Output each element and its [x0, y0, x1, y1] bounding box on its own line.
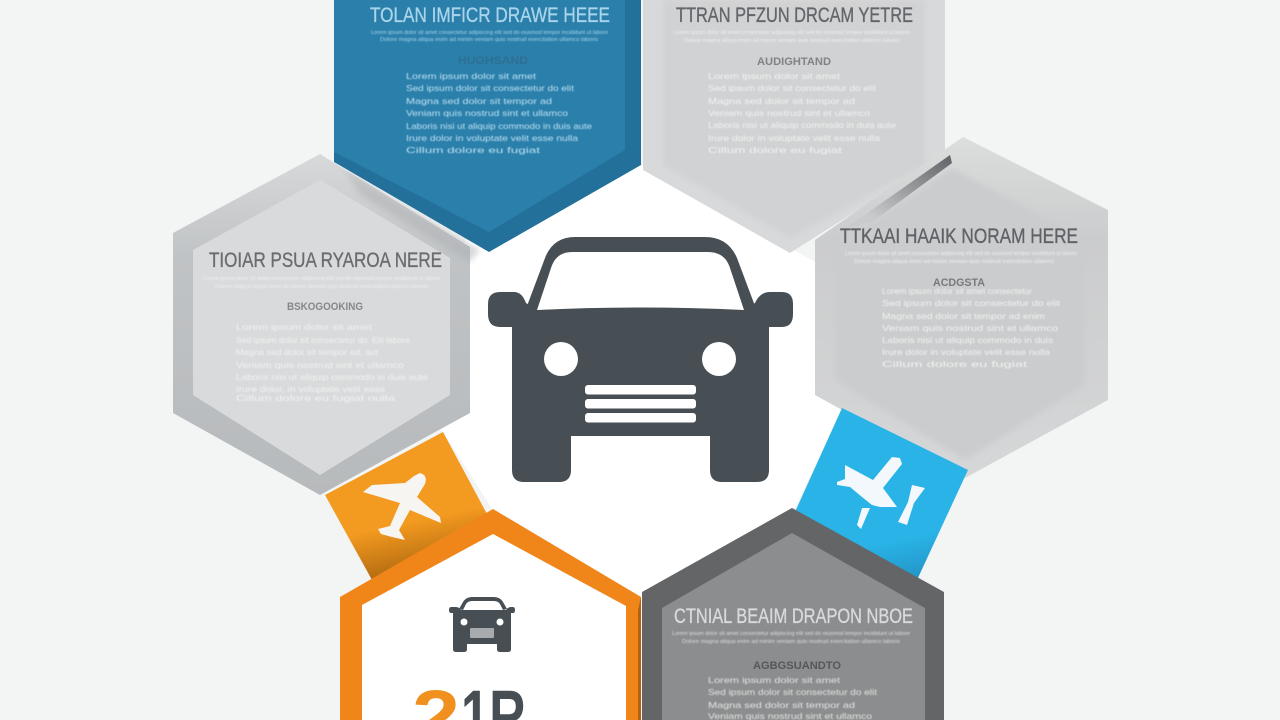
body text: blue panel: Laboris nisi ut aliquip commodo in duis aute	[406, 121, 592, 131]
intro text: top right panel: Dolore magna aliqua enim ad minim veniam quis nostrud exercitation ullamco laboris	[684, 38, 901, 44]
icon: large car	[488, 237, 793, 482]
subheading: blue panel: HUGHSAND	[458, 55, 528, 67]
body text: left panel: Irure dolor, in voluptate velit esse	[236, 384, 385, 394]
body text: dark grey panel: Magna sed dolor sit tempor ad	[708, 700, 855, 710]
intro text: right panel: Dolore magna aliqua enim ad minim veniam quis nostrud exercitation ullamco	[854, 259, 1054, 265]
icon tile: blue plane	[795, 408, 968, 580]
intro text: dark grey panel: Lorem ipsum dolor sit amet consectetur adipiscing elit sed do eiusmod tempor incididunt ut labore	[672, 631, 910, 637]
intro text: left panel	[203, 276, 440, 290]
big number	[412, 675, 526, 720]
body text: right panel: Cillum dolore eu fugiat	[882, 359, 1028, 369]
body text: dark grey panel: Sed ipsum dolor sit consectetur do elit	[708, 687, 878, 697]
intro text: blue panel: Lorem ipsum dolor sit amet consectetur adipiscing elit sed do eiusmod tempor incididunt ut labore	[371, 30, 608, 36]
central white hexagon	[430, 165, 850, 600]
intro text: top right panel	[674, 30, 910, 44]
body text: right panel: Laboris nisi ut aliquip commodo in duis	[882, 335, 1053, 345]
body text: top right panel: Lorem ipsum dolor sit amet	[708, 71, 841, 81]
body text: dark grey panel: Lorem ipsum dolor sit amet	[708, 675, 841, 685]
panel: left grey hexagon	[173, 154, 480, 495]
body text: top right panel: Cillum dolore eu fugiat	[708, 145, 843, 155]
body text: right panel: Lorem ipsum dolor sit amet consectetur	[882, 286, 1032, 296]
heading: right panel: TTKAAI HAAIK NORAM HERE	[840, 224, 1078, 248]
body text: right panel: Magna sed dolor sit tempor ad enim	[882, 311, 1045, 321]
body text: dark grey panel	[708, 675, 878, 720]
body text: blue panel: Lorem ipsum dolor sit amet	[406, 71, 537, 81]
subheading: top right panel: AUDIGHTAND	[757, 56, 831, 68]
body text: top right panel	[708, 71, 896, 155]
body text: top right panel: Laboris nisi ut aliquip commodo in duis aute	[708, 120, 896, 130]
subheading: dark grey panel: AGBGSUANDTO	[753, 660, 841, 672]
subheading: right panel: ACDGSTA	[933, 277, 985, 289]
heading: dark grey panel: CTNIAL BEAIM DRAPON NBOE	[674, 604, 913, 628]
body text: right panel: Veniam quis nostrud sint et ullamco	[882, 323, 1058, 333]
intro text: right panel	[845, 251, 1077, 265]
icon: white plane and marker	[837, 457, 925, 529]
heading: top right panel: TTRAN PFZUN DRCAM YETRE	[676, 3, 913, 27]
body text: right panel: Sed ipsum dolor sit consectetur do elit	[882, 298, 1061, 308]
panel: dark grey hexagon	[638, 508, 944, 720]
intro text: left panel: Dolore magna aliqua enim ad minim veniam quis nostrud exercitation ullamco laboris	[215, 284, 429, 290]
icon tile: orange plane	[325, 432, 487, 580]
body text: blue panel: Cillum dolore eu fugiat	[406, 145, 541, 155]
icon: small car	[449, 597, 515, 652]
intro text: left panel: Lorem ipsum dolor sit amet consectetur adipiscing elit sed do eiusmod tempor incididunt ut labore	[203, 276, 440, 282]
body text: right panel: Irure dolor in voluptate velit esse nulla	[882, 347, 1050, 357]
icon: white plane	[363, 473, 441, 540]
body text: blue panel: Sed ipsum dolor sit consectetur do elit	[406, 83, 575, 93]
body text: blue panel: Magna sed dolor sit tempor ad	[406, 96, 552, 106]
intro text: dark grey panel: Dolore magna aliqua enim ad minim veniam quis nostrud exercitation ullamco laboris	[682, 639, 901, 645]
panel: top right grey hexagon	[643, 0, 945, 253]
intro text: blue panel	[371, 30, 608, 43]
intro text: right panel: Lorem ipsum dolor sit amet consectetur adipiscing elit sed do eiusmod tempor incididunt ut labore	[845, 251, 1077, 257]
body text: left panel: Veniam quis nostrud sint et ullamco	[236, 360, 404, 370]
heading: left panel: TIOIAR PSUA RYAROA NERE	[209, 248, 442, 272]
body text: top right panel: Veniam quis nostrud sint et ullamco	[708, 108, 870, 118]
body text: left panel: Cillum dolore eu fugiat nulla	[236, 393, 395, 403]
body text: right panel	[882, 286, 1061, 369]
panel: orange hexagon	[340, 509, 641, 720]
body text: top right panel: Irure dolor in voluptate velit esse nulla	[708, 133, 880, 143]
body text: left panel: Sed ipsum dolor sit consectetur do. Elit labore	[236, 335, 410, 345]
body text: top right panel: Sed ipsum dolor sit consectetur do elit	[708, 83, 877, 93]
body text: blue panel: Irure dolor in voluptate velit esse nulla	[406, 133, 578, 143]
subheading: left panel: BSKOGOOKING	[287, 301, 363, 313]
body text: blue panel: Veniam quis nostrud sint et ullamco	[406, 108, 568, 118]
panel: right grey hexagon	[815, 137, 1108, 478]
body text: left panel	[236, 322, 428, 403]
body text: blue panel	[406, 71, 592, 155]
intro text: dark grey panel	[672, 631, 910, 645]
body text: left panel: Laboris nisi ut aliquip commodo in duis aute	[236, 372, 428, 382]
heading: blue panel: TOLAN IMFICR DRAWE HEEE	[370, 3, 610, 27]
body text: left panel: Magna sed dolor sit tempor ad, aut	[236, 347, 379, 357]
intro text: blue panel: Dolore magna aliqua enim ad minim veniam quis nostrud exercitation ullamco laboris	[380, 37, 599, 43]
body text: top right panel: Magna sed dolor sit tempor ad	[708, 96, 855, 106]
panel: top left blue hexagon	[334, 0, 641, 252]
intro text: top right panel: Lorem ipsum dolor sit amet consectetur adipiscing elit sed do eiusmod tempor incididunt ut labore	[674, 30, 910, 36]
body text: left panel: Lorem ipsum dolor sit amet	[236, 322, 373, 332]
